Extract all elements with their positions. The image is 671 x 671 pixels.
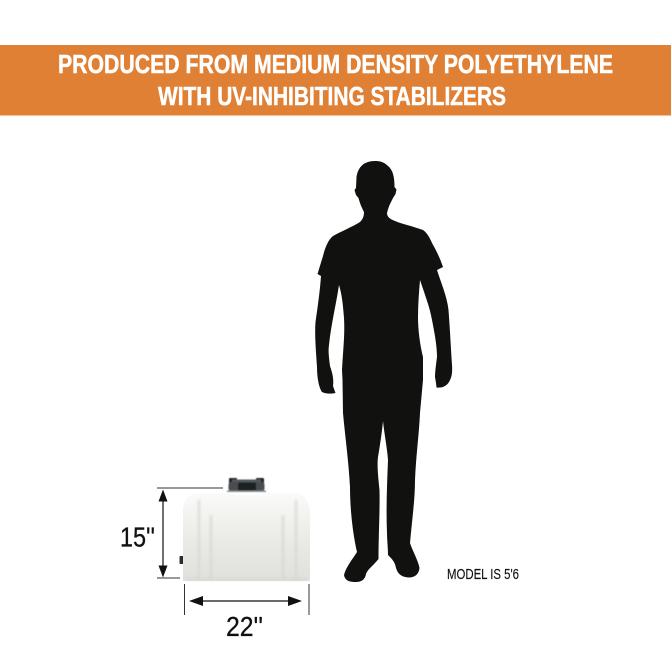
person silhouette xyxy=(315,161,452,582)
heading line 2: WITH UV-INHIBITING STABILIZERS xyxy=(158,83,506,111)
tank xyxy=(180,478,310,581)
width dimension xyxy=(184,584,309,642)
label 15 inches: 15'' xyxy=(120,522,155,552)
model height note: MODEL IS 5'6 xyxy=(447,567,519,583)
tank body xyxy=(183,493,310,581)
tank spout xyxy=(180,556,184,564)
tank cap xyxy=(227,478,266,492)
tank molded ribs xyxy=(186,500,307,579)
label 22 inches: 22'' xyxy=(226,611,263,642)
height dimension xyxy=(120,488,223,578)
header banner xyxy=(0,45,671,116)
